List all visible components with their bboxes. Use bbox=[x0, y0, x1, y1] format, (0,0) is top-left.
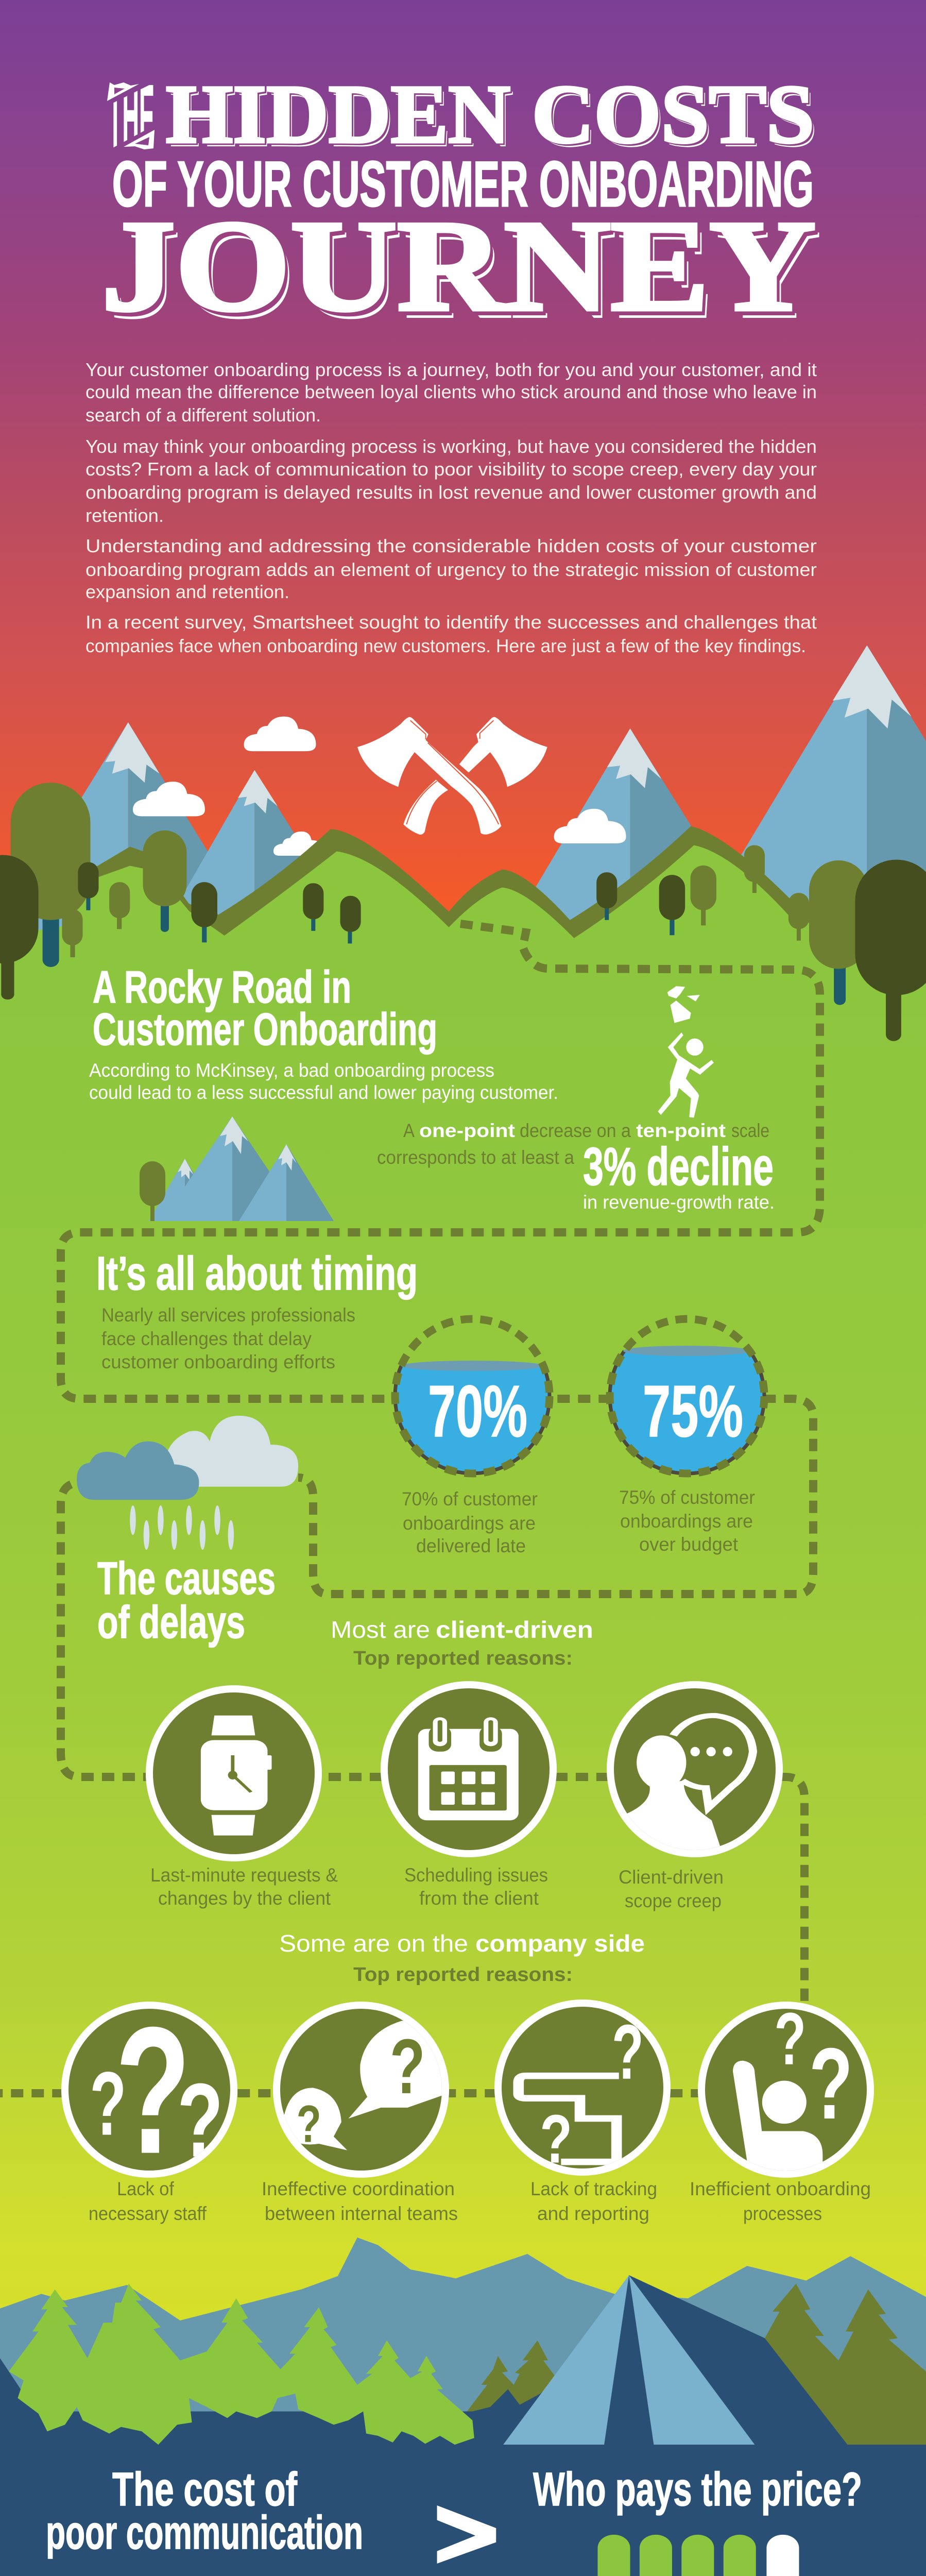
intro text block: search of a different solution. bbox=[85, 404, 321, 426]
icon: tracking and reporting bbox=[494, 1999, 671, 2177]
captions: company-side reasons: Lack of tracking bbox=[530, 2178, 657, 2199]
title line: Hidden Costs: HIDDEN COSTS bbox=[166, 69, 814, 161]
mountain landscape scene bbox=[0, 646, 926, 1016]
olive trees right and hill bbox=[765, 2284, 926, 2447]
captions: company-side reasons: Ineffective coordination bbox=[262, 2178, 455, 2199]
icon: coordination speech bubbles: ? bbox=[297, 2095, 321, 2154]
subheading: client-driven: Most are bbox=[331, 1616, 430, 1643]
captions: company-side reasons: necessary staff bbox=[89, 2203, 207, 2224]
subheading: client-driven: client-driven bbox=[436, 1616, 593, 1643]
icon: tracking and reporting: ? bbox=[540, 2101, 572, 2177]
title line: Journey: JOURNEY bbox=[105, 198, 819, 343]
icon: lack of staff question marks: ? bbox=[90, 2054, 126, 2154]
caption: 70%: 70% of customer bbox=[402, 1488, 538, 1510]
callout: 3% decline bbox=[377, 1120, 775, 1213]
captions: client-driven reasons: scope creep bbox=[625, 1890, 722, 1911]
text: McKinsey statement bbox=[89, 1060, 558, 1103]
caption: 70%: onboardings are bbox=[403, 1513, 536, 1534]
caption: 75%: onboardings are bbox=[620, 1511, 753, 1532]
icon: client with speech bubble bbox=[607, 1681, 783, 1866]
caption: 75%: over budget bbox=[639, 1534, 739, 1555]
text: timing description: Nearly all services professionals bbox=[101, 1304, 355, 1326]
background: green meadow gradient bbox=[0, 927, 926, 2445]
intro text block: retention. bbox=[85, 505, 164, 526]
captions: client-driven reasons: Client-driven bbox=[619, 1867, 724, 1888]
heading: cost of poor communication: The cost of bbox=[112, 2463, 297, 2516]
panel: the cost of poor communication bbox=[44, 2463, 387, 2576]
captions: company-side reasons: between internal teams bbox=[265, 2203, 458, 2224]
pictogram: ten trees, one white bbox=[597, 2535, 799, 2576]
dashed journey path bbox=[0, 924, 820, 2093]
icon: tent bbox=[503, 2275, 848, 2445]
trees bbox=[0, 783, 809, 999]
callout: 3% decline: in revenue-growth rate. bbox=[583, 1192, 775, 1213]
captions: company-side reasons: Lack of bbox=[117, 2178, 175, 2199]
icon: crossed axes bbox=[357, 717, 547, 835]
captions: client-driven reasons: from the client bbox=[419, 1888, 539, 1909]
icon: coordination speech bubbles bbox=[273, 2002, 449, 2178]
camp scene: mountains, forest and tent bbox=[0, 2238, 926, 2447]
caption: 70% bbox=[402, 1488, 538, 1556]
callout: 3% decline: 3% decline bbox=[583, 1137, 774, 1197]
heading: cost of poor communication: poor communication bbox=[46, 2506, 363, 2559]
captions: client-driven reasons: Last-minute requests & bbox=[150, 1865, 338, 1886]
chart: 70% bucket bbox=[395, 1319, 550, 1473]
callout: 3% decline: decrease on a bbox=[520, 1120, 631, 1141]
intro text block: Understanding and addressing the considerable hidden costs of your customer bbox=[85, 535, 817, 556]
intro text block: onboarding program adds an element of urgency to the strategic mission of customer bbox=[85, 559, 817, 580]
background: sky gradient bbox=[0, 0, 926, 979]
icon: calendar bbox=[381, 1681, 557, 1857]
mountain: center bbox=[502, 728, 765, 943]
subheading: company side: company side bbox=[475, 1930, 645, 1957]
captions: client-driven reasons: changes by the client bbox=[158, 1888, 331, 1909]
text: McKinsey statement: could lead to a less successful and lower paying customer. bbox=[89, 1082, 558, 1103]
caption: 75% bbox=[619, 1487, 755, 1555]
intro text block: You may think your onboarding process is working, but have you considered the hidden bbox=[85, 436, 817, 457]
mountain: large right bbox=[688, 646, 926, 943]
intro text block: onboarding program is delayed results in lost revenue and lower customer growth and bbox=[85, 482, 817, 503]
captions: client-driven reasons: Scheduling issues bbox=[404, 1865, 548, 1886]
heading: rocky road: A Rocky Road in bbox=[93, 961, 351, 1012]
captions: company-side reasons: processes bbox=[743, 2203, 822, 2224]
panel: the causes of delays bbox=[61, 1416, 874, 2224]
chart: 70% bucket: 70% bbox=[428, 1370, 527, 1452]
chart: 75% bucket bbox=[610, 1319, 764, 1473]
icon: inefficient processes bbox=[698, 1998, 874, 2180]
heading: rocky road bbox=[93, 961, 437, 1055]
icon: lack of staff question marks: ? bbox=[115, 1989, 191, 2191]
heading: cost of poor communication bbox=[46, 2463, 363, 2559]
captions: company-side reasons bbox=[89, 2178, 871, 2224]
title line: Journey: JOURNEY bbox=[101, 194, 816, 338]
icon: inefficient processes: ? bbox=[809, 2027, 853, 2140]
icon: person throwing rock bbox=[658, 986, 714, 1117]
title word: The bbox=[107, 82, 155, 149]
text: McKinsey statement: According to McKinsey, a bad onboarding process bbox=[89, 1060, 494, 1081]
hills bbox=[0, 826, 926, 1016]
text: timing description: customer onboarding efforts bbox=[101, 1351, 335, 1372]
subheading: company side: Top reported reasons: bbox=[353, 1964, 573, 1986]
panel: it's all about timing bbox=[96, 1247, 764, 1556]
intro text block bbox=[85, 359, 817, 656]
text: timing description bbox=[101, 1304, 355, 1372]
icon: lack of staff question marks bbox=[61, 2002, 237, 2178]
intro text block: costs? From a lack of communication to poor visibility to scope creep, every day your bbox=[85, 459, 817, 480]
heading: causes of delays: The causes bbox=[97, 1552, 276, 1604]
intro text block: could mean the difference between loyal clients who stick around and those who leave in bbox=[85, 381, 817, 402]
subheading: client-driven: Top reported reasons: bbox=[353, 1648, 573, 1669]
title bbox=[106, 82, 819, 319]
subheading: client-driven bbox=[331, 1616, 593, 1669]
intro text block: expansion and retention. bbox=[85, 581, 289, 602]
subheading: company side bbox=[279, 1930, 645, 1986]
back mountain range bbox=[0, 2238, 926, 2447]
olive trees center bbox=[464, 2341, 567, 2420]
icon: chevrons bbox=[437, 2505, 496, 2576]
callout: 3% decline: scale bbox=[731, 1120, 769, 1141]
subheading: company side: Some are on the bbox=[279, 1930, 468, 1957]
title line: Journey: JOURNEY bbox=[108, 202, 822, 346]
title: THE bbox=[108, 65, 155, 168]
panel: navy cost section bbox=[0, 2445, 926, 2576]
caption: 70%: delivered late bbox=[416, 1535, 526, 1556]
navy forest ground bbox=[0, 2358, 591, 2447]
caption: 75%: 75% of customer bbox=[619, 1487, 755, 1508]
callout: 3% decline: corresponds to at least a bbox=[377, 1147, 574, 1168]
heading: causes of delays: of delays bbox=[97, 1596, 245, 1648]
heading: rocky road: Customer Onboarding bbox=[93, 1004, 437, 1055]
heading: timing: It’s all about timing bbox=[96, 1247, 418, 1300]
intro text block: Your customer onboarding process is a journey, both for you and your customer, and it bbox=[85, 359, 817, 380]
icon: coordination speech bubbles: ? bbox=[390, 2023, 425, 2110]
intro text block: companies face when onboarding new customers. Here are just a few of the key findings. bbox=[85, 635, 806, 656]
title line: Hidden Costs: HIDDEN COSTS bbox=[169, 73, 818, 165]
mountain: far left bbox=[0, 722, 265, 943]
text: timing description: face challenges that delay bbox=[101, 1328, 312, 1349]
icon: mini mountains with tree bbox=[140, 1116, 334, 1221]
icon: lack of staff question marks: ? bbox=[177, 2062, 223, 2179]
mountain: left second bbox=[155, 770, 363, 943]
panel: who pays the price bbox=[523, 2463, 862, 2576]
intro text block: In a recent survey, Smartsheet sought to identify the successes and challenges that bbox=[85, 612, 817, 633]
icon: tracking and reporting: ? bbox=[612, 2009, 644, 2095]
captions: company-side reasons: and reporting bbox=[537, 2203, 649, 2224]
chart: 75% bucket: 75% bbox=[643, 1370, 743, 1452]
callout: 3% decline: one-point bbox=[419, 1120, 515, 1141]
clouds bbox=[133, 717, 626, 856]
panel: a rocky road bbox=[89, 961, 775, 1221]
captions: company-side reasons: Inefficient onboarding bbox=[690, 2178, 871, 2199]
green conifer forest bbox=[9, 2284, 474, 2445]
callout: 3% decline: A bbox=[403, 1120, 415, 1141]
callout: 3% decline: ten-point bbox=[636, 1120, 726, 1141]
icon: rain clouds bbox=[77, 1416, 298, 1550]
captions: client-driven reasons bbox=[150, 1865, 724, 1911]
foreground large trees, right bbox=[809, 860, 926, 1041]
heading: causes of delays bbox=[97, 1552, 276, 1648]
icon: smartwatch bbox=[146, 1685, 322, 1861]
icon: inefficient processes: ? bbox=[774, 1998, 806, 2080]
title line: Hidden Costs: HIDDEN COSTS bbox=[168, 71, 816, 163]
